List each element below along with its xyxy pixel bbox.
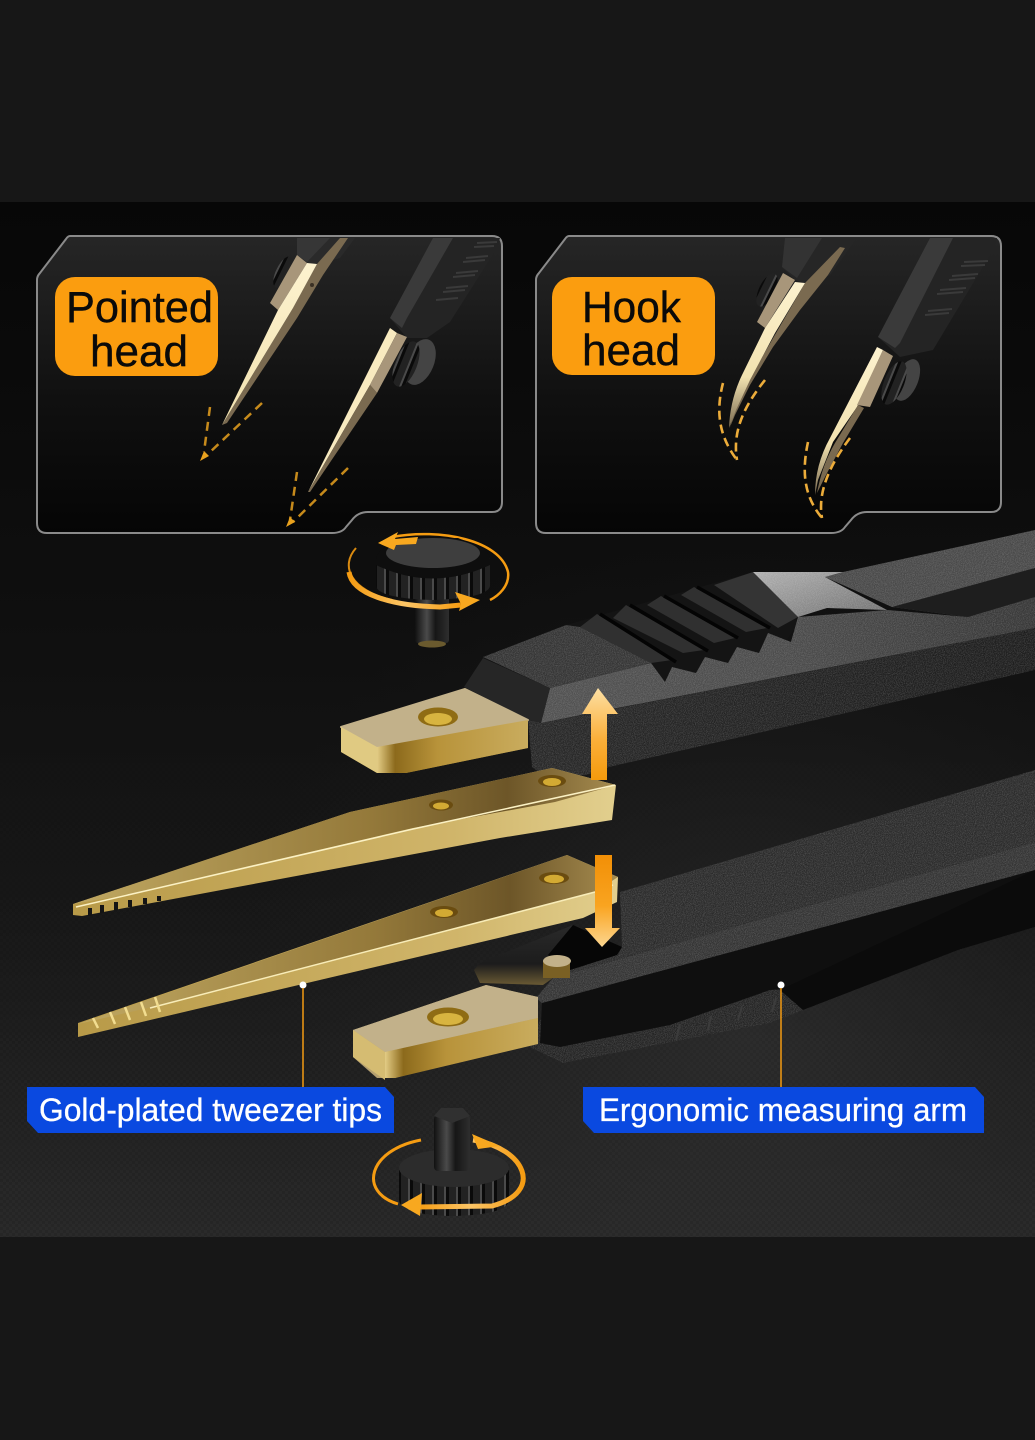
icon: lower gold mount plate <box>353 985 538 1080</box>
bevel band <box>536 842 1035 1003</box>
icon: right hook tweezer <box>815 238 997 495</box>
nose top <box>483 625 651 688</box>
infographic <box>0 202 1035 1237</box>
icon: black clip and pin <box>474 925 622 985</box>
callout: ergonomic measuring arm: Ergonomic measuring arm <box>599 1092 967 1128</box>
textured side <box>541 597 1035 723</box>
icon: lower gold tweezer tip <box>78 855 618 1037</box>
top face <box>553 770 1035 978</box>
icon: left hook direction arrows <box>719 380 765 460</box>
black side <box>540 870 1035 1047</box>
icon: right pointed tweezer <box>308 238 500 492</box>
icon: upper measuring arm <box>464 530 1035 777</box>
icon: up arrow <box>582 688 618 780</box>
icon: upper gold tweezer tip <box>73 768 616 916</box>
callout: ergonomic measuring arm <box>583 982 984 1133</box>
callout: gold-plated tweezer tips <box>27 982 394 1133</box>
icon: top thumbscrew with rotation arrows <box>349 532 508 648</box>
callout: gold-plated tweezer tips: Gold-plated tweezer tips <box>39 1092 382 1128</box>
icon: left pointed tweezer <box>222 238 355 425</box>
icon: right pointed direction arrows <box>286 468 348 527</box>
rear groove <box>892 568 1035 617</box>
grip teeth <box>580 572 798 663</box>
light wedge <box>753 572 887 617</box>
panel: hook head <box>536 236 1001 533</box>
icon: upper gold mount plate <box>341 689 528 773</box>
icon: left pointed direction arrows <box>200 403 262 461</box>
nose front <box>464 658 550 723</box>
grey under lip <box>530 880 1035 1063</box>
icon: bottom thumbscrew with rotation arrows <box>374 1108 523 1216</box>
label: pointed head: head <box>90 327 188 376</box>
grip base groove <box>566 572 800 680</box>
background <box>0 202 1035 1237</box>
label: pointed head <box>55 277 218 376</box>
icon: left hook tweezer <box>729 238 857 428</box>
icon: down arrow <box>585 855 620 947</box>
panel: pointed head <box>37 236 502 533</box>
rear top face <box>825 530 1035 617</box>
label: hook head <box>552 277 715 375</box>
icon: right hook direction arrows <box>805 438 850 518</box>
lower dark side <box>528 628 1035 777</box>
label: pointed head: Pointed <box>66 283 213 332</box>
label: hook head: Hook <box>582 283 682 332</box>
label: hook head: head <box>582 326 680 375</box>
groove shadows <box>600 587 770 662</box>
icon: lower measuring arm <box>530 770 1035 1063</box>
